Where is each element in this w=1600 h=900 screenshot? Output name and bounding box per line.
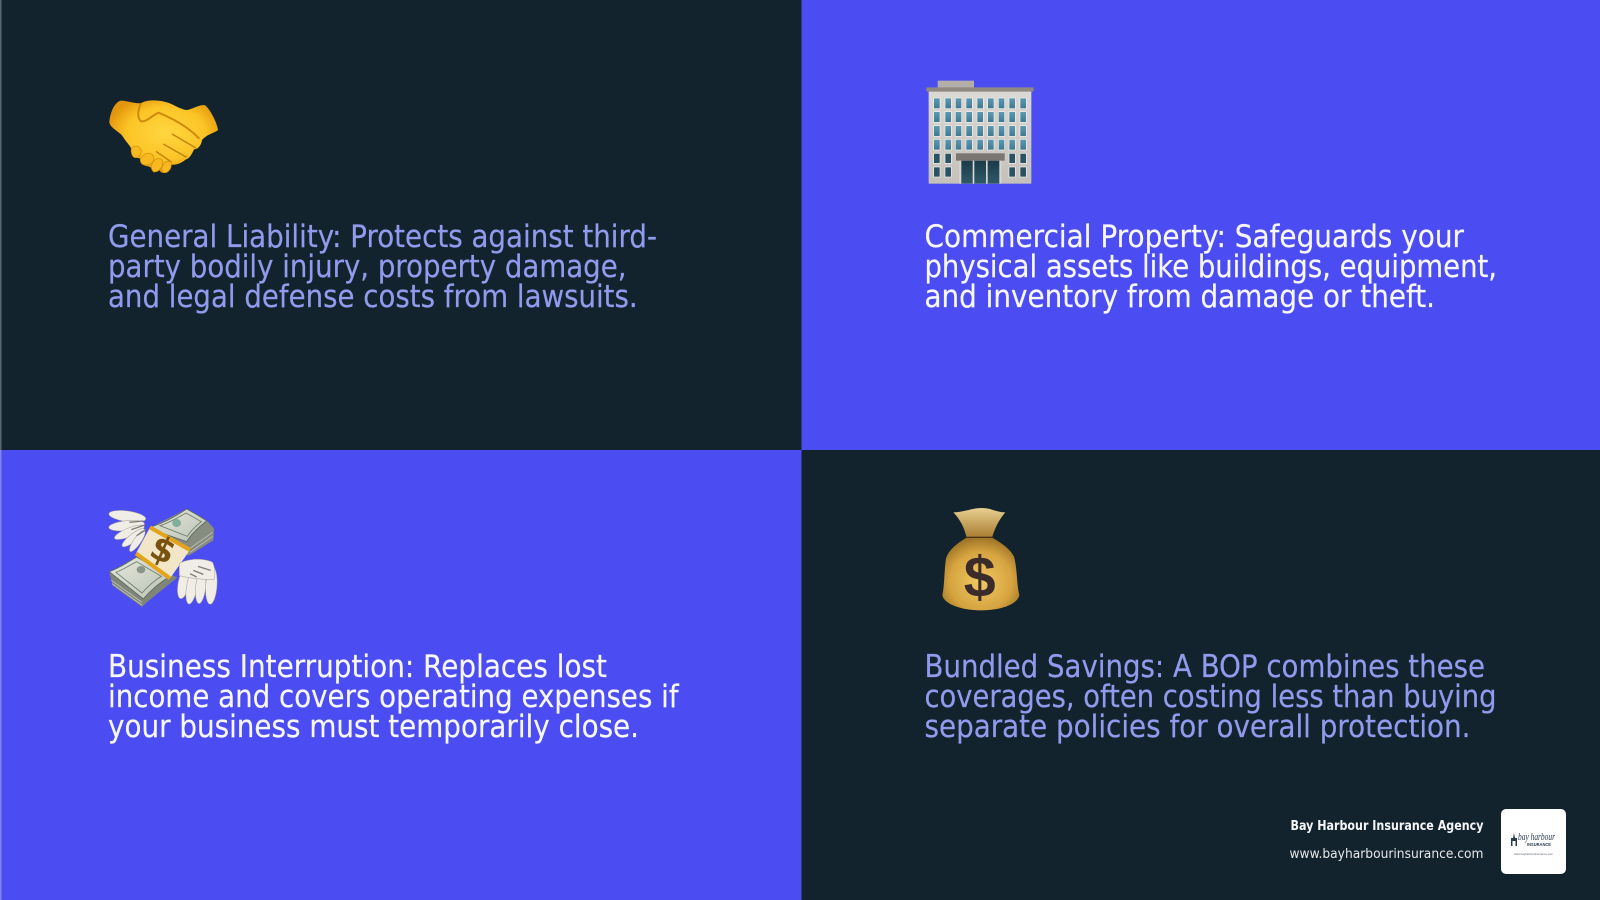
icon: money bag: $: [964, 545, 996, 609]
icon: money bag: [942, 508, 1019, 610]
text: business interruption: your business must temporarily close.: [108, 709, 639, 745]
panel: business interruption: [0, 450, 802, 900]
icon: handshake: [109, 100, 218, 173]
text: business interruption: [108, 649, 680, 745]
text: general liability: party bodily injury, property damage,: [108, 249, 626, 285]
text: general liability: General Liability: Protects against third-: [108, 219, 657, 255]
icon: money with wings: [108, 508, 218, 607]
text: general liability: and legal defense costs from lawsuits.: [108, 279, 638, 315]
panel: general liability: [0, 0, 802, 450]
logo card: bay harbour: [1518, 832, 1555, 843]
footer: agency name: Bay Harbour Insurance Agency: [1290, 819, 1484, 834]
text: business interruption: income and covers operating expenses if: [108, 679, 680, 715]
footer: website: www.bayharbourinsurance.com: [1290, 847, 1484, 862]
text: bundled savings: Bundled Savings: A BOP combines these: [924, 649, 1485, 685]
icon: money with wings: $: [144, 527, 182, 573]
text: business interruption: Business Interruption: Replaces lost: [108, 649, 607, 685]
text: commercial property: physical assets like buildings, equipment,: [924, 249, 1497, 285]
text: bundled savings: [924, 649, 1496, 745]
logo card: INSURANCE: [1527, 842, 1551, 847]
icon: office building: [926, 81, 1034, 184]
text: bundled savings: coverages, often costing less than buying: [924, 679, 1496, 715]
logo card: www.bayharbourinsurance.com: [1514, 853, 1553, 856]
text: bundled savings: separate policies for overall protection.: [924, 709, 1470, 745]
panel: commercial property: [802, 0, 1600, 450]
text: commercial property: and inventory from damage or theft.: [924, 279, 1435, 315]
text: commercial property: [924, 219, 1497, 315]
panel: bundled savings: [802, 450, 1600, 900]
text: general liability: [108, 219, 657, 315]
text: commercial property: Commercial Property: Safeguards your: [924, 219, 1464, 255]
logo card: [1501, 809, 1566, 874]
